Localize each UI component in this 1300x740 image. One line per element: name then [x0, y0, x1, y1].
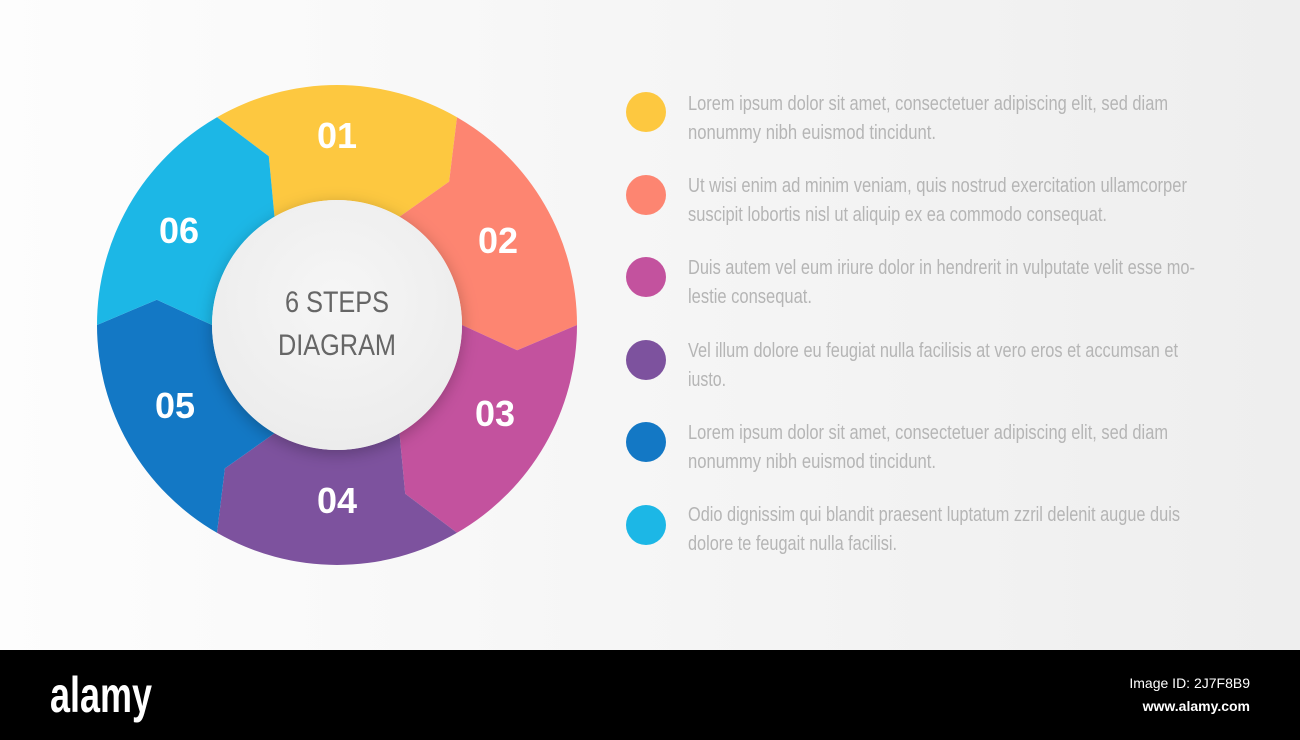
segment 06: [97, 117, 274, 325]
item 5: Lorem ipsum dolor sit amet, consectetuer adipiscing elit, sed diam: [688, 422, 1168, 444]
segment 01: 01: [317, 115, 357, 156]
segment 05: [97, 300, 274, 533]
item 3: [626, 257, 1195, 308]
segment 03: 03: [475, 393, 515, 434]
footer bar: www.alamy.com: [1142, 698, 1250, 714]
segment 05: 05: [155, 385, 195, 426]
item 6: [626, 504, 1180, 555]
item 4: Vel illum dolore eu feugiat nulla facilisis at vero eros et accumsan et: [688, 340, 1178, 362]
center circle title: DIAGRAM: [278, 329, 396, 362]
item 5: [626, 422, 1168, 473]
item 3: Duis autem vel eum iriure dolor in hendrerit in vulputate velit esse mo-: [688, 257, 1195, 279]
item 6: dolore te feugait nulla facilisi.: [688, 533, 897, 555]
footer bar: alamy: [50, 667, 152, 723]
segment 04: [217, 433, 457, 565]
item 1: nonummy nibh euismod tincidunt.: [688, 122, 936, 144]
diagram: 6 step ring: [97, 85, 577, 565]
footer bar: [0, 650, 1300, 740]
item 5: nonummy nibh euismod tincidunt.: [688, 451, 936, 473]
segment 02: 02: [478, 220, 518, 261]
item 6: Odio dignissim qui blandit praesent luptatum zzril delenit augue duis: [688, 504, 1180, 526]
center circle title: 6 STEPS: [285, 286, 389, 319]
item 2: [626, 175, 1187, 226]
segment 02: [400, 117, 577, 350]
footer bar: Image ID: 2J7F8B9: [1129, 675, 1250, 691]
item 4: iusto.: [688, 369, 726, 391]
item 3: lestie consequat.: [688, 286, 812, 308]
center circle title: [212, 200, 462, 450]
segment 01: [217, 85, 457, 217]
item 4: [626, 340, 1178, 391]
legend list: [626, 92, 1195, 555]
item 2: suscipit lobortis nisl ut aliquip ex ea commodo consequat.: [688, 204, 1107, 226]
segment 06: 06: [159, 210, 199, 251]
segment 04: 04: [317, 480, 357, 521]
item 1: Lorem ipsum dolor sit amet, consectetuer adipiscing elit, sed diam: [688, 93, 1168, 115]
item 2: Ut wisi enim ad minim veniam, quis nostrud exercitation ullamcorper: [688, 175, 1187, 197]
segment 03: [400, 325, 577, 533]
item 1: [626, 92, 1168, 144]
